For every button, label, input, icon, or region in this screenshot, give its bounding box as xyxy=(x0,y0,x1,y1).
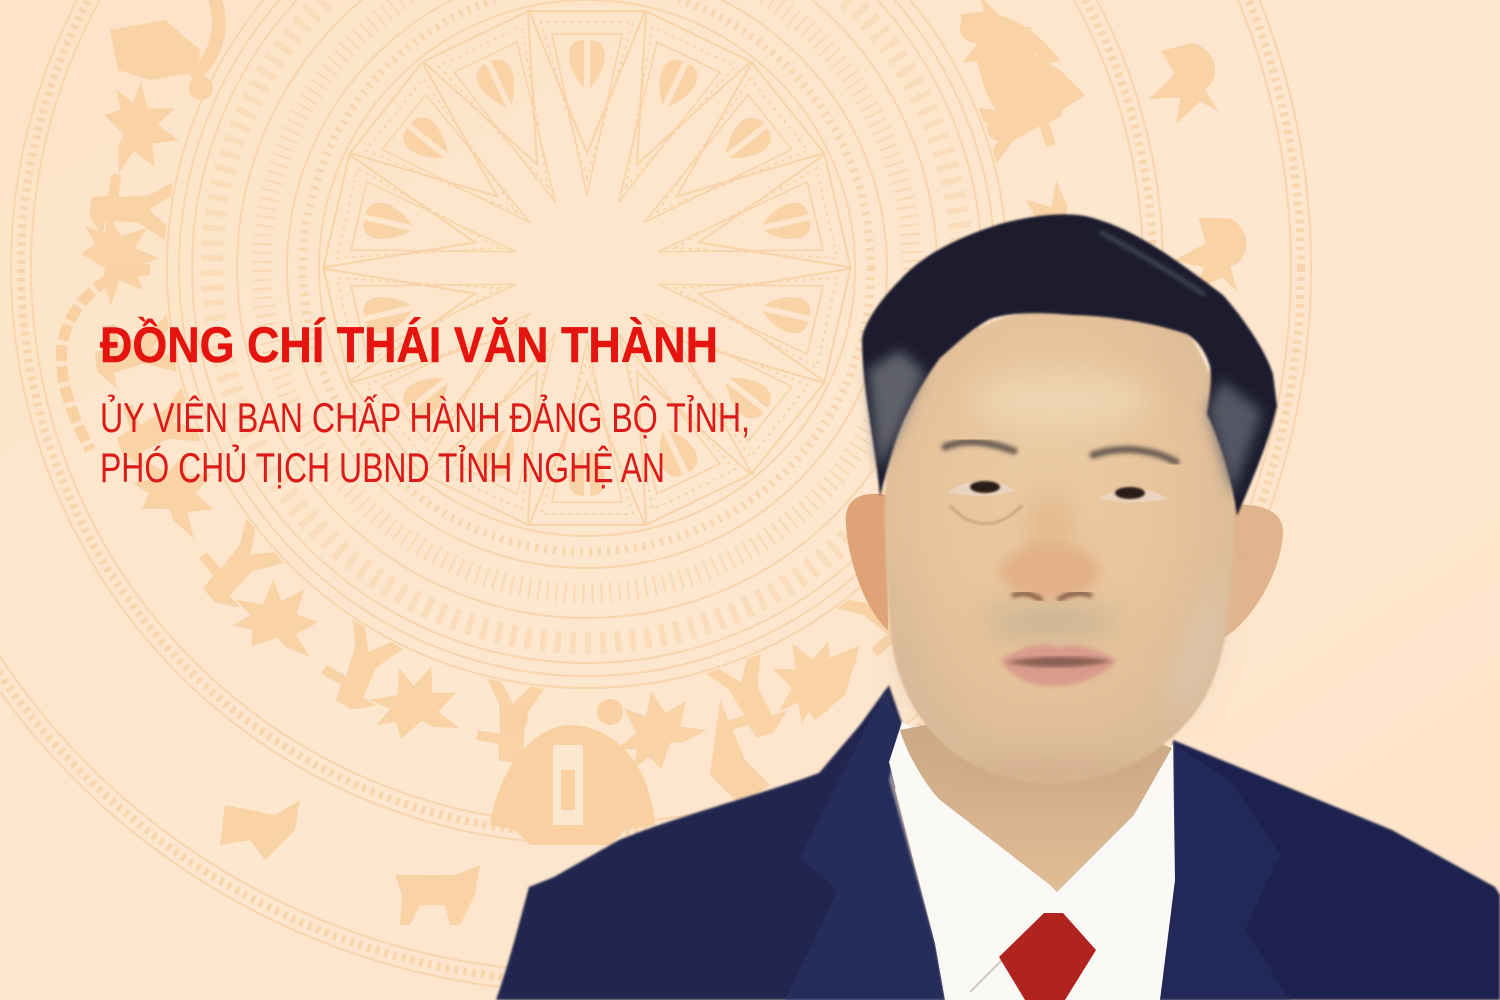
eyes xyxy=(948,481,1168,524)
subtitle xyxy=(100,393,750,491)
left ear xyxy=(846,494,888,630)
inner ring animals xyxy=(81,0,1096,776)
hut bottom xyxy=(490,699,655,845)
eyebrows xyxy=(945,442,1176,462)
subtitle line 2: PHÓ CHỦ TỊCH UBND TỈNH NGHỆ AN xyxy=(100,443,665,491)
left eye xyxy=(948,481,1015,496)
hair xyxy=(862,214,1277,516)
mouth xyxy=(1000,645,1117,686)
lapels xyxy=(785,690,1290,1000)
hair highlight xyxy=(1100,232,1205,295)
right eye xyxy=(1100,489,1168,502)
grey temples xyxy=(868,350,1262,495)
face shading xyxy=(890,370,1220,782)
suit right xyxy=(1154,740,1500,1000)
nose xyxy=(1000,546,1100,600)
right ear xyxy=(1220,505,1283,640)
face xyxy=(885,310,1235,784)
title: ĐỒNG CHÍ THÁI VĂN THÀNH xyxy=(100,317,718,373)
star rays xyxy=(324,11,850,525)
subtitle line 1: ỦY VIÊN BAN CHẤP HÀNH ĐẢNG BỘ TỈNH, xyxy=(100,393,750,441)
left eye bag xyxy=(950,505,1022,524)
tie xyxy=(999,913,1096,1000)
portrait xyxy=(496,214,1500,1000)
bird figures bottom xyxy=(220,645,860,925)
shirt xyxy=(889,722,1175,1000)
suit left xyxy=(496,685,945,1000)
boat house top left xyxy=(110,0,226,100)
collar line xyxy=(970,960,1002,992)
dragon left xyxy=(61,270,150,450)
boat house top right xyxy=(960,12,1085,141)
neck xyxy=(900,700,1172,892)
outer ring birds xyxy=(982,0,1248,451)
